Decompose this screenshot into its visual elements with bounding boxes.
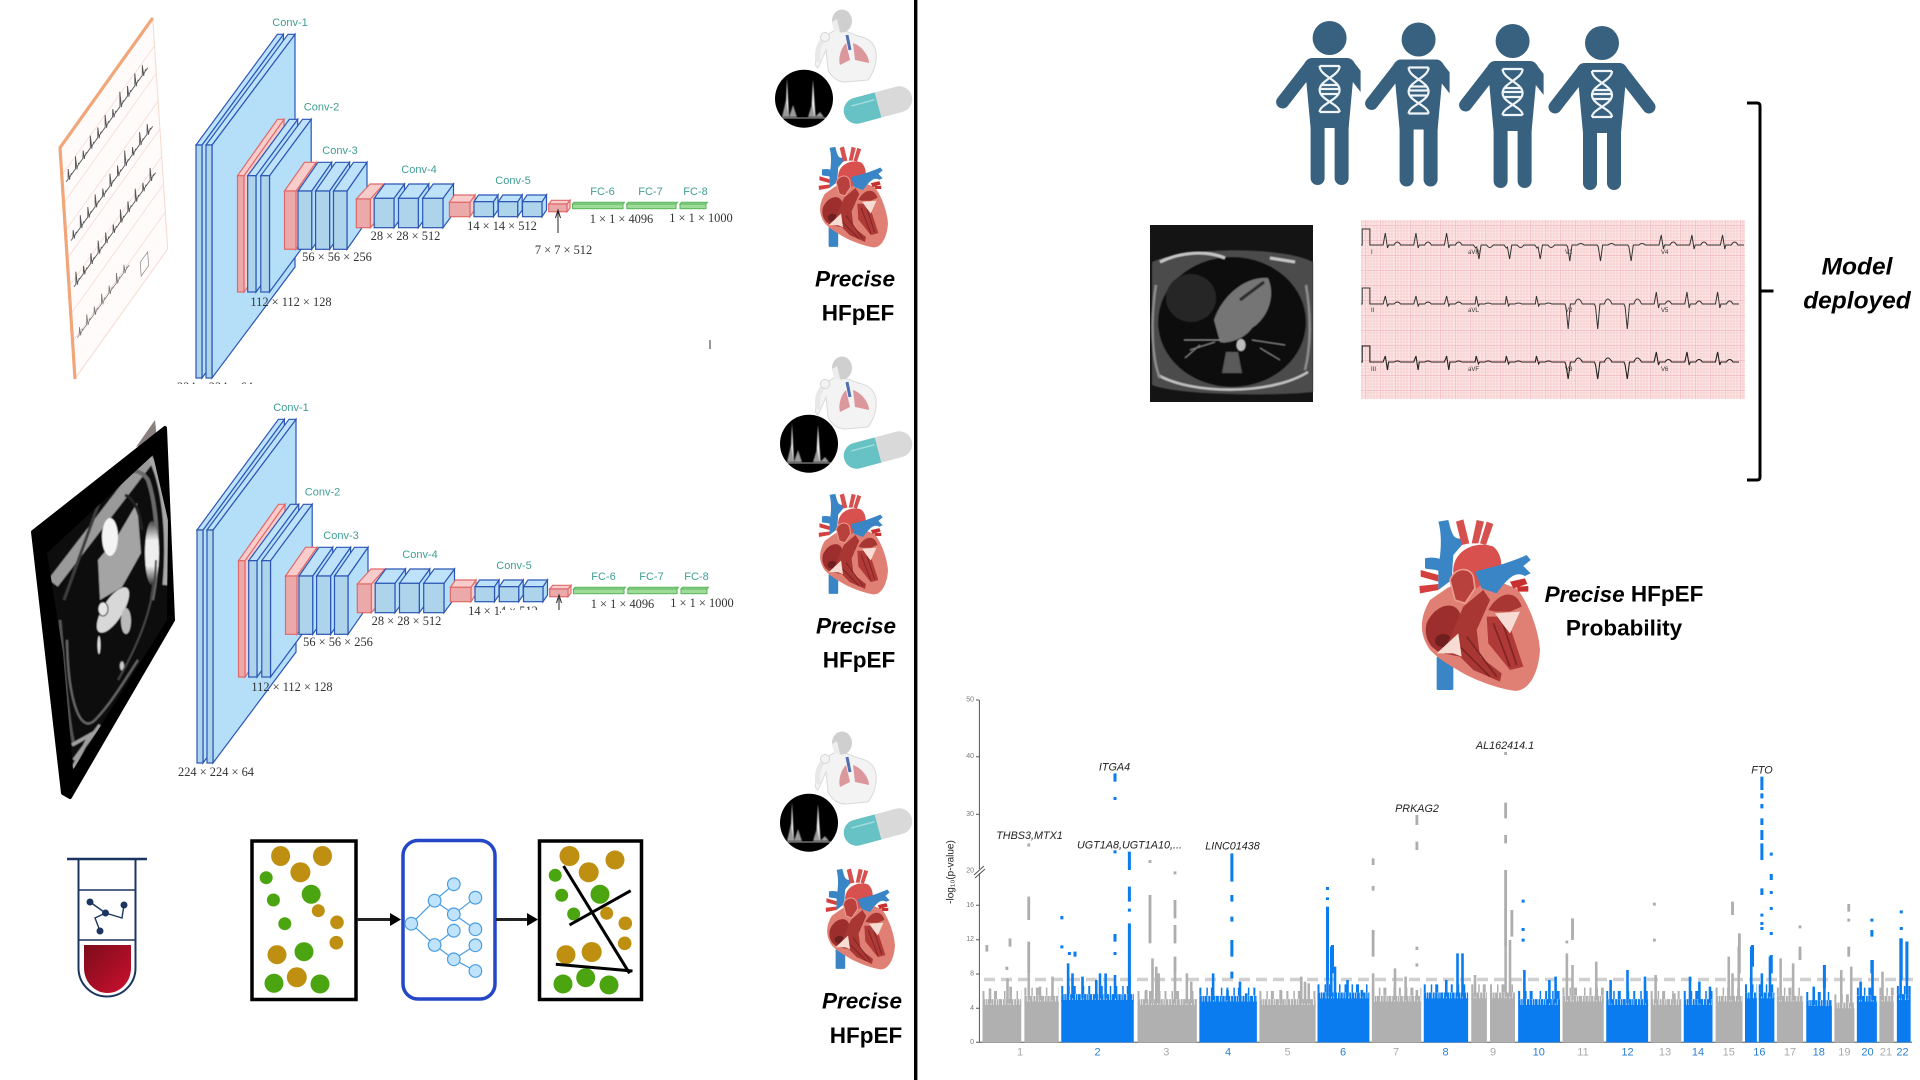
network labels: Conv-4	[402, 549, 438, 561]
chromosome labels: 16	[1753, 1046, 1766, 1058]
network labels: 28 × 28 × 512	[371, 229, 440, 243]
y axis: 30	[966, 811, 974, 818]
network labels	[177, 17, 733, 394]
chromosome labels: 19	[1838, 1046, 1851, 1058]
chromosome labels: 2	[1094, 1046, 1101, 1058]
conv-3 block	[286, 547, 368, 634]
chromosome labels: 17	[1784, 1046, 1796, 1058]
chromosome labels: 8	[1443, 1046, 1449, 1058]
label: Precise HFpEF: Precise	[822, 988, 902, 1014]
ECG lead labels: V1	[1565, 250, 1573, 256]
label: Precise HFpEF	[816, 614, 896, 672]
chromosome labels	[1017, 1046, 1909, 1058]
y axis: 20	[966, 868, 974, 874]
network labels: FC-6	[591, 571, 616, 583]
network labels: 7 × 7 × 512	[535, 243, 592, 257]
ECG lead labels: II	[1371, 308, 1375, 314]
network labels: FC-8	[684, 571, 709, 583]
y axis: 16	[966, 902, 974, 909]
ECG lead labels: aVR	[1468, 250, 1480, 256]
label: Precise HFpEF: HFpEF	[822, 300, 894, 326]
panel: 12-lead ECG strip	[1361, 220, 1745, 399]
gene labels: AL162414.1	[1475, 740, 1534, 752]
network labels: 112 × 112 × 128	[251, 680, 333, 694]
panel: test tube icon	[67, 859, 147, 996]
network labels: 224 × 224 × 64	[177, 380, 253, 394]
chromosome labels: 10	[1533, 1046, 1545, 1058]
grey peaks	[990, 940, 1882, 1007]
chromosome labels: 7	[1393, 1046, 1399, 1058]
icon: large heart	[1419, 519, 1540, 691]
chromosome labels: 4	[1225, 1046, 1231, 1058]
network labels: Conv-1	[272, 17, 308, 29]
gene labels: ITGA4	[1099, 762, 1130, 774]
gene labels: FTO	[1751, 764, 1773, 776]
label: Model deployed: Model	[1822, 254, 1894, 280]
label: Precise HFpEF: Precise	[815, 266, 895, 292]
gene labels: UGT1A8,UGT1A10,...	[1077, 840, 1182, 852]
chromosome labels: 5	[1284, 1046, 1291, 1058]
network labels: Conv-3	[322, 145, 358, 157]
panel: output column biomarkers	[780, 732, 915, 1048]
blue chromosome bands	[1061, 998, 1911, 1042]
grey significant loci	[987, 752, 1849, 973]
panel: output column MRI	[780, 356, 915, 672]
ECG lead labels: V4	[1661, 250, 1669, 256]
divider	[914, 0, 917, 1080]
y axis: -log₁₀(p-value)	[946, 840, 956, 904]
blue peaks	[1068, 913, 1907, 1005]
icon: patient lungs	[815, 356, 876, 429]
panel: output column ECG	[775, 10, 915, 326]
network labels: Conv-1	[273, 402, 309, 414]
conv-5 block	[449, 195, 570, 217]
chromosome labels: 6	[1340, 1046, 1346, 1058]
chromosome labels: 15	[1723, 1046, 1735, 1058]
arrow: pooling output	[556, 210, 560, 233]
network labels: FC-7	[639, 571, 664, 583]
y axis: 50	[966, 696, 974, 704]
conv-1 block	[197, 419, 296, 763]
label: Precise HFpEF: HFpEF	[823, 648, 895, 672]
ECG lead labels: aVL	[1468, 308, 1479, 314]
icon: heart	[826, 868, 895, 969]
network labels: FC-7	[638, 186, 663, 198]
conv-4 block	[356, 184, 454, 228]
network labels: 56 × 56 × 256	[303, 635, 373, 649]
y axis	[946, 696, 1912, 1046]
network labels: FC-6	[590, 186, 615, 198]
network labels: 28 × 28 × 512	[372, 614, 441, 628]
stray tick	[709, 340, 711, 349]
label: Precise HFpEF	[815, 266, 895, 326]
label: Precise HFpEF Probability: Probability	[1566, 616, 1683, 640]
sliver of image corner	[136, 420, 157, 447]
chromosome labels: 21	[1880, 1046, 1892, 1058]
network labels: 1 × 1 × 1000	[670, 596, 734, 610]
blue significant loci	[1062, 773, 1907, 1013]
icon: pill	[841, 83, 915, 127]
chromosome labels: 12	[1621, 1046, 1634, 1058]
icon: person 4 with DNA	[1555, 26, 1649, 190]
chromosome labels: 11	[1577, 1046, 1589, 1058]
network labels	[178, 402, 734, 779]
network labels: Conv-5	[495, 175, 531, 187]
arrow: samples to model	[357, 913, 401, 926]
ECG trace row 2	[1361, 288, 1739, 329]
gene labels	[996, 740, 1773, 852]
ECG trace row 1	[1361, 229, 1744, 261]
fully connected layers	[574, 587, 708, 594]
significance threshold	[984, 978, 1915, 981]
gene labels: LINC01438	[1205, 840, 1260, 852]
panel: VGG network (MRI)	[178, 402, 734, 779]
grey noise fringe	[982, 988, 1894, 1006]
panel: decision tree model	[403, 840, 495, 999]
MRI tissue	[47, 455, 168, 770]
network labels: 14 × 14 × 512	[468, 604, 538, 618]
conv-2 block	[238, 504, 312, 677]
network labels: Conv-4	[401, 164, 437, 176]
ECG lead labels: III	[1371, 367, 1376, 373]
arrow: model to partitioned samples	[496, 913, 538, 926]
ECG lead labels: V2	[1565, 308, 1573, 314]
y axis: 0	[970, 1039, 974, 1046]
ECG trace row 3	[1361, 346, 1739, 379]
crop mask	[170, 384, 270, 396]
icon: doppler	[775, 70, 833, 128]
network labels: 1 × 1 × 4096	[591, 597, 654, 611]
chromosome labels: 13	[1659, 1046, 1671, 1058]
network labels: 224 × 224 × 64	[178, 765, 254, 779]
icon: patient lungs	[815, 10, 876, 82]
arrow: pooling output	[556, 595, 562, 610]
icon: person 3 with DNA	[1466, 24, 1560, 188]
network labels: Conv-2	[305, 486, 340, 498]
panel: partitioned samples box	[540, 841, 642, 1000]
network labels: Conv-3	[323, 530, 359, 542]
label: Precise HFpEF	[822, 988, 902, 1048]
icon: pill	[841, 428, 915, 472]
chromosome labels: 9	[1490, 1046, 1496, 1058]
conv-2 block	[238, 119, 311, 292]
chromosome labels: 22	[1896, 1046, 1909, 1058]
MRI frame	[33, 428, 173, 797]
panel: VGG network (ECG)	[170, 17, 733, 396]
ECG lead labels	[1371, 250, 1669, 373]
y axis: 12	[966, 936, 974, 943]
blue noise fringe	[1061, 988, 1911, 1004]
label: Precise HFpEF: Precise	[816, 614, 896, 638]
network labels: 1 × 1 × 4096	[590, 212, 653, 226]
panel: cardiac MRI input	[30, 420, 180, 800]
network labels: 56 × 56 × 256	[302, 250, 372, 264]
panel: axial cardiac MRI	[1150, 225, 1313, 402]
label mask	[501, 610, 546, 619]
bracket	[1747, 103, 1774, 480]
chromosome labels: 18	[1813, 1046, 1825, 1058]
panel: ECG sheet input	[60, 18, 168, 379]
chromosome labels: 3	[1163, 1046, 1169, 1058]
icon: heart	[819, 493, 888, 594]
panel: scattered samples box	[252, 841, 356, 1000]
conv-1 block	[196, 34, 295, 378]
icon: patient lungs	[815, 732, 876, 804]
fully connected layers	[572, 202, 708, 209]
icon: doppler	[780, 415, 838, 473]
ECG lead labels: I	[1371, 250, 1373, 256]
grey chromosome bands	[982, 998, 1894, 1042]
icon: pill	[841, 805, 915, 849]
ECG lead labels: V3	[1565, 367, 1573, 373]
chromosome labels: 14	[1692, 1046, 1704, 1058]
network labels: 14 × 14 × 512	[467, 219, 537, 233]
y axis: 8	[970, 970, 974, 978]
label: Precise HFpEF Probability: Precise HFpEF	[1545, 582, 1703, 606]
label: Model deployed	[1803, 254, 1912, 314]
chart: Manhattan plot	[946, 696, 1915, 1058]
network labels: Conv-5	[496, 560, 532, 572]
y axis: 4	[970, 1005, 974, 1012]
network labels: Conv-2	[304, 102, 339, 114]
chromosome labels: 1	[1017, 1046, 1023, 1058]
label: Precise HFpEF Probability	[1545, 582, 1703, 640]
network labels: 1 × 1 × 1000	[669, 211, 733, 225]
network labels: 112 × 112 × 128	[250, 295, 332, 309]
icon: heart	[819, 146, 888, 247]
y axis: 40	[966, 753, 974, 760]
ECG lead labels: aVF	[1468, 367, 1479, 373]
gene labels: PRKAG2	[1395, 803, 1439, 815]
chromosome labels: 20	[1861, 1046, 1874, 1058]
gene labels: THBS3,MTX1	[996, 830, 1063, 842]
label: Model deployed: deployed	[1803, 288, 1912, 314]
conv-4 block	[357, 569, 454, 613]
label: Precise HFpEF: HFpEF	[830, 1023, 902, 1048]
conv-5 block	[450, 580, 571, 602]
network labels: FC-8	[683, 186, 708, 198]
ECG lead labels: V6	[1661, 367, 1669, 373]
ECG lead labels: V5	[1661, 308, 1669, 314]
icon: person 2 with DNA	[1372, 22, 1466, 186]
conv-3 block	[284, 162, 367, 249]
icon: doppler	[780, 794, 838, 852]
icon: person 1 with DNA	[1283, 21, 1377, 185]
